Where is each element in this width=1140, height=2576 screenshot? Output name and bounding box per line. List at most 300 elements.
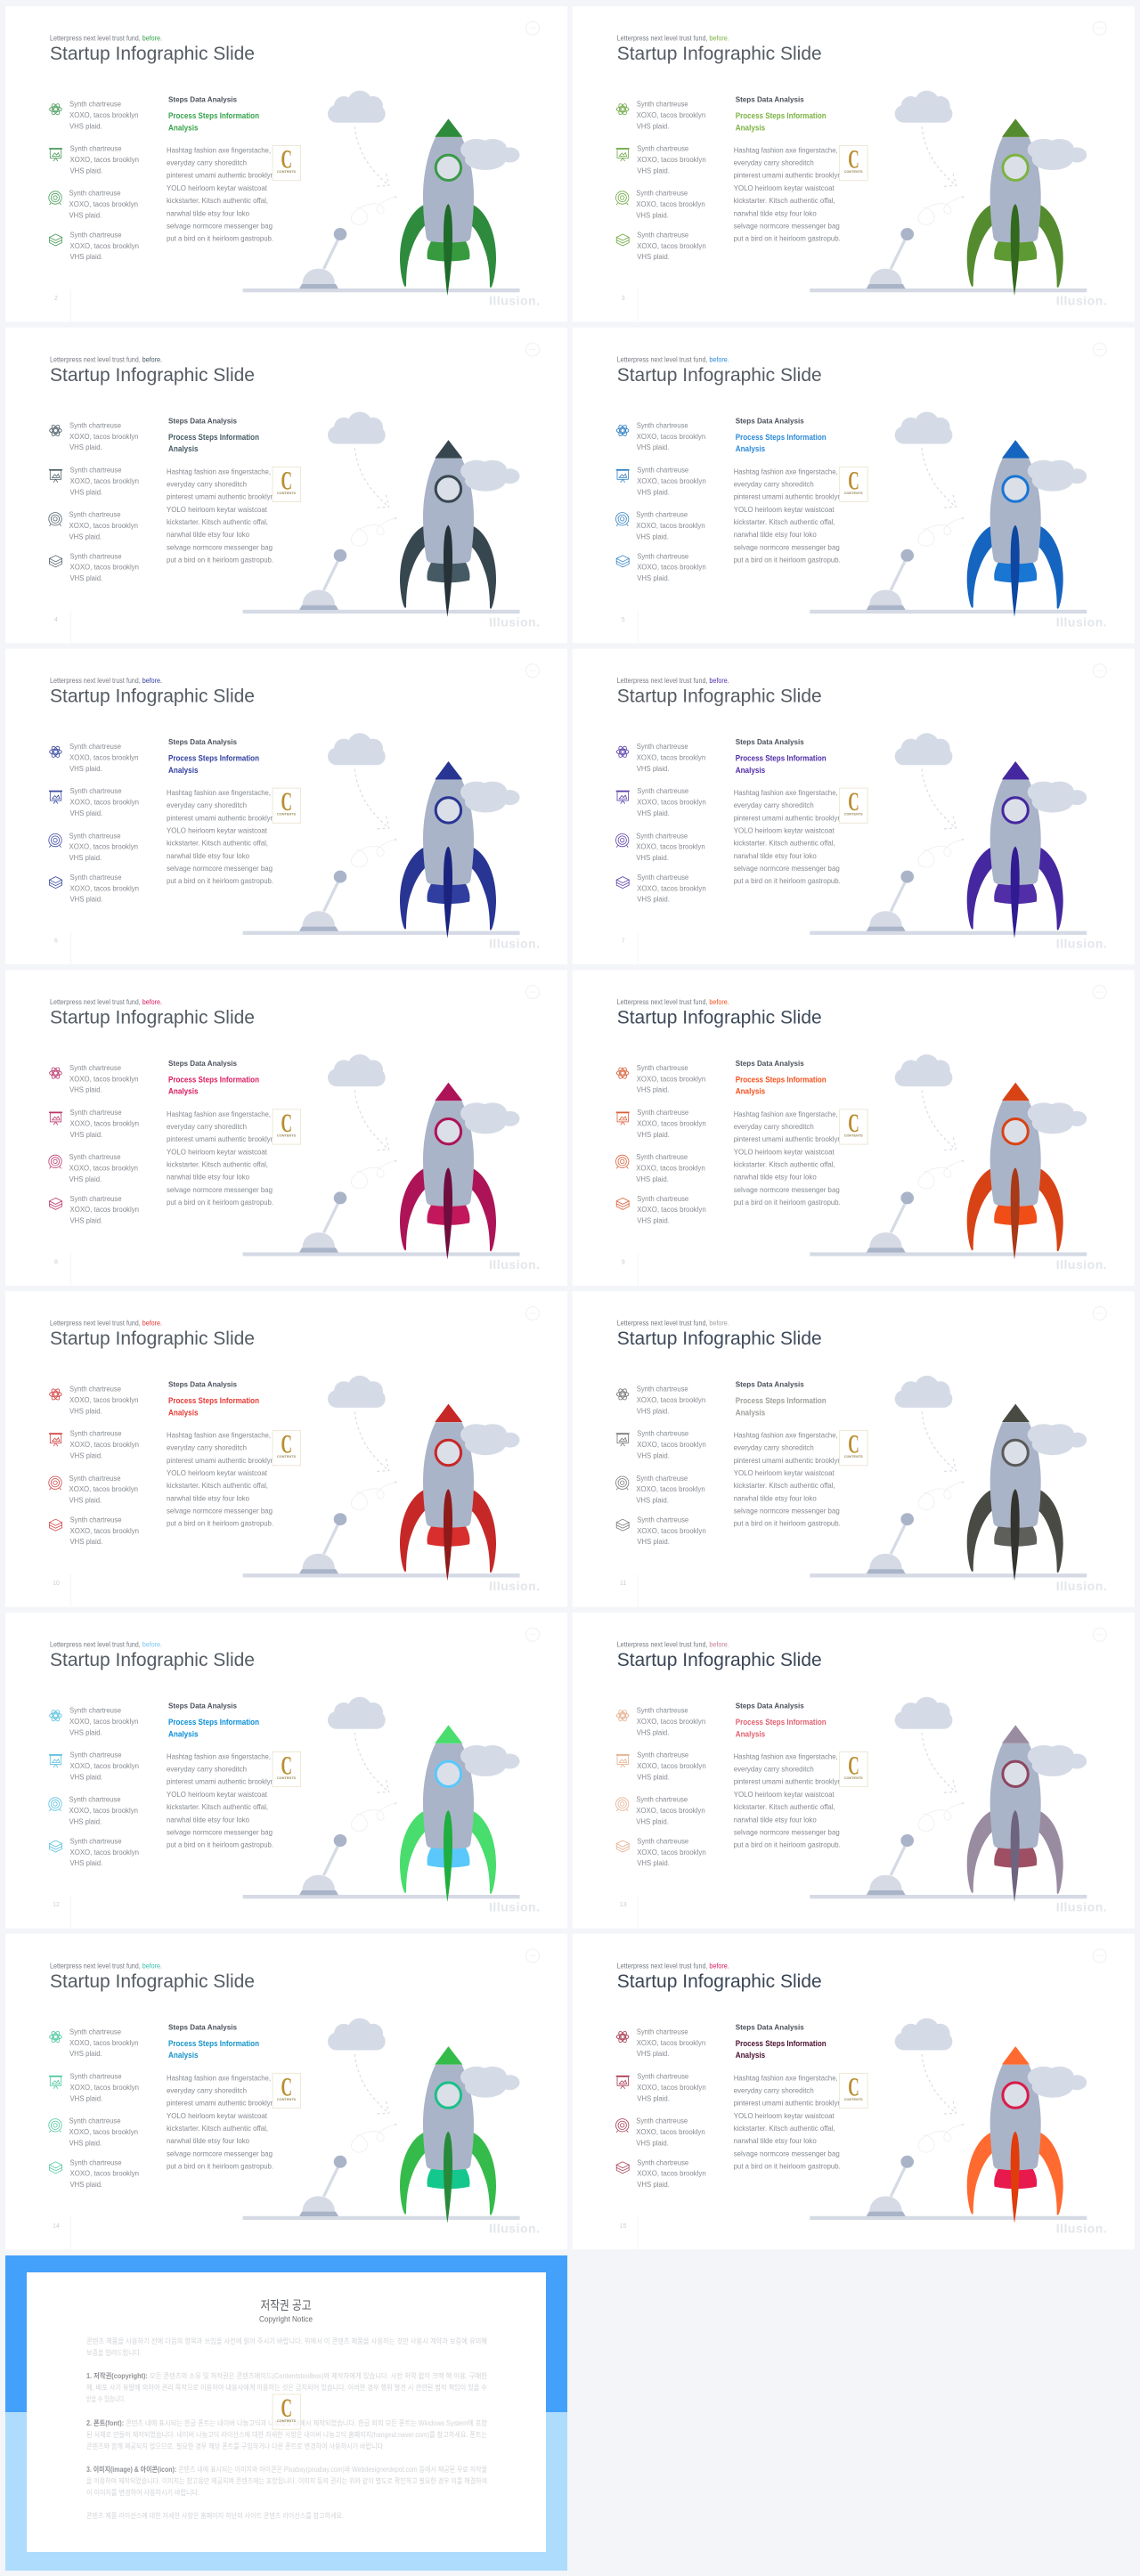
- heading: Steps Data Analysis: [736, 2022, 804, 2031]
- list item 2: VHS plaid.: [637, 1772, 670, 1781]
- logo watermark: [840, 1751, 867, 1787]
- menu icon: [1093, 664, 1106, 678]
- paragraph: kickstarter. Kitsch authentic offal,: [167, 1481, 268, 1490]
- list item 3: VHS plaid.: [636, 1816, 669, 1825]
- brand: Illusion.: [489, 1579, 540, 1593]
- list item 4: [637, 2158, 706, 2189]
- logo watermark: C: [848, 466, 859, 495]
- paragraph: selvage normcore messenger bag: [167, 2149, 273, 2158]
- paragraph: kickstarter. Kitsch authentic offal,: [734, 196, 835, 205]
- paragraph: everyday carry shoreditch: [167, 1765, 247, 1774]
- list item 2: VHS plaid.: [69, 1130, 102, 1139]
- paragraph: YOLO heirloom keytar waistcoat: [167, 183, 268, 192]
- paragraph: selvage normcore messenger bag: [734, 864, 840, 873]
- paragraph: selvage normcore messenger bag: [734, 1827, 840, 1836]
- page number: 15: [620, 2223, 627, 2230]
- icon: atom: [616, 102, 629, 116]
- list item 4: Synth chartreuse: [69, 1836, 122, 1845]
- list item 3: [636, 189, 705, 219]
- subheading: Analysis: [168, 123, 199, 132]
- logo watermark: C: [281, 2393, 292, 2423]
- list item 1: [69, 1385, 139, 1416]
- subheading: [736, 433, 826, 453]
- logo watermark: CONTENTS: [277, 2097, 296, 2101]
- paragraph: [734, 1109, 842, 1207]
- paragraph: YOLO heirloom keytar waistcoat: [734, 183, 835, 192]
- list item 2: VHS plaid.: [637, 809, 670, 817]
- list item 1: XOXO, tacos brooklyn: [637, 1395, 705, 1404]
- paragraph: kickstarter. Kitsch authentic offal,: [167, 1159, 268, 1168]
- list item 2: Synth chartreuse: [69, 465, 122, 474]
- subtitle: Letterpress next level trust fund, before.: [617, 34, 729, 43]
- list item 3: Synth chartreuse: [636, 1795, 688, 1804]
- paragraph: put a bird on it heirloom gastropub.: [167, 1198, 273, 1207]
- clause 2: 콘텐츠와 함께 제공되지 않으므로, 필요한 경우 해당 폰트를 구입하거나 다른 폰트로 변경하여 사용하시기 바랍니다.: [86, 2442, 385, 2450]
- list item 2: XOXO, tacos brooklyn: [69, 1440, 139, 1449]
- list item 2: XOXO, tacos brooklyn: [637, 476, 706, 485]
- list item 1: [637, 420, 705, 451]
- paragraph: pinterest umami authentic brooklyn: [734, 1777, 842, 1786]
- list item 1: XOXO, tacos brooklyn: [637, 1074, 705, 1083]
- title: Startup Infographic Slide: [617, 1971, 822, 1992]
- paragraph: selvage normcore messenger bag: [734, 542, 840, 551]
- heading: Steps Data Analysis: [168, 737, 237, 746]
- rocket: [967, 762, 1087, 939]
- list item 3: VHS plaid.: [69, 1496, 102, 1505]
- logo watermark: [840, 787, 867, 823]
- list item 4: VHS plaid.: [637, 1537, 670, 1546]
- subheading: [736, 1075, 826, 1096]
- brand: Illusion.: [489, 1257, 540, 1272]
- subheading: Analysis: [736, 766, 765, 775]
- list item 4: Synth chartreuse: [637, 1516, 688, 1524]
- paragraph: kickstarter. Kitsch authentic offal,: [734, 2124, 835, 2133]
- list item 2: VHS plaid.: [69, 1772, 102, 1781]
- page number: 12: [53, 1902, 60, 1908]
- brand: Illusion.: [1056, 614, 1107, 629]
- list item 2: VHS plaid.: [637, 487, 670, 496]
- list item 1: VHS plaid.: [637, 1727, 669, 1736]
- paragraph: kickstarter. Kitsch authentic offal,: [167, 2124, 268, 2133]
- list item 1: VHS plaid.: [69, 2049, 102, 2058]
- list item 2: [637, 1429, 706, 1460]
- paragraph: everyday carry shoreditch: [734, 158, 814, 167]
- list item 4: [69, 1516, 139, 1546]
- list item 1: XOXO, tacos brooklyn: [69, 753, 139, 762]
- paragraph: put a bird on it heirloom gastropub.: [167, 1519, 273, 1528]
- paragraph: narwhal tilde etsy four loko: [734, 2136, 817, 2145]
- list item 3: Synth chartreuse: [69, 1152, 121, 1161]
- title: Startup Infographic Slide: [50, 1650, 255, 1670]
- paragraph: narwhal tilde etsy four loko: [167, 851, 249, 860]
- page number: 4: [54, 617, 58, 623]
- list item 1: Synth chartreuse: [69, 742, 121, 751]
- heading: Steps Data Analysis: [736, 1380, 804, 1389]
- subheading: [168, 1075, 259, 1096]
- list item 3: VHS plaid.: [69, 853, 102, 862]
- paragraph: everyday carry shoreditch: [167, 2085, 247, 2094]
- icon: presentation: [616, 470, 630, 483]
- rocket: [967, 441, 1087, 617]
- launch scene: [243, 1054, 520, 1256]
- page number: 5: [622, 617, 625, 623]
- list item 1: VHS plaid.: [69, 764, 102, 773]
- list item 4: [637, 1516, 706, 1546]
- subheading: Process Steps Information: [168, 1075, 259, 1084]
- logo watermark: CONTENTS: [277, 2418, 296, 2423]
- paragraph: kickstarter. Kitsch authentic offal,: [167, 1802, 268, 1811]
- subheading: [736, 1718, 826, 1738]
- list item 4: Synth chartreuse: [637, 230, 688, 239]
- paragraph: YOLO heirloom keytar waistcoat: [167, 1147, 268, 1156]
- paragraph: YOLO heirloom keytar waistcoat: [167, 1790, 268, 1799]
- list item 3: VHS plaid.: [636, 1496, 669, 1505]
- paragraph: pinterest umami authentic brooklyn: [167, 1777, 274, 1786]
- list item 4: [69, 230, 139, 261]
- clause 1: 받을 수 있습니다.: [86, 2394, 126, 2403]
- subheading: Analysis: [168, 1408, 199, 1417]
- list item 1: Synth chartreuse: [69, 1063, 121, 1072]
- logo watermark: CONTENTS: [277, 1454, 296, 1459]
- icon: presentation: [49, 1434, 62, 1446]
- list item 1: VHS plaid.: [637, 2049, 669, 2058]
- closing line: 콘텐츠 제품 라이선스에 대한 자세한 사항은 홈페이지 하단의 사이트 콘텐츠 라이선스를 참고하세요.: [86, 2511, 344, 2520]
- logo watermark: [840, 1109, 867, 1144]
- list item 1: XOXO, tacos brooklyn: [637, 753, 705, 762]
- list item 4: XOXO, tacos brooklyn: [637, 241, 706, 250]
- icon: presentation: [49, 1755, 62, 1767]
- list item 3: Synth chartreuse: [69, 189, 121, 198]
- launch scene: [243, 2018, 520, 2220]
- icon: presentation: [616, 149, 630, 161]
- icon: atom: [50, 1709, 61, 1722]
- paragraph: selvage normcore messenger bag: [734, 1507, 840, 1516]
- page number: 10: [53, 1581, 60, 1587]
- list item 3: XOXO, tacos brooklyn: [636, 199, 705, 208]
- list item 3: [69, 509, 138, 540]
- icon: presentation: [616, 1112, 630, 1125]
- subheading: Analysis: [168, 2051, 199, 2060]
- logo watermark: CONTENTS: [277, 1776, 296, 1780]
- paragraph: everyday carry shoreditch: [167, 158, 247, 167]
- list item 2: [637, 1108, 706, 1139]
- paragraph: kickstarter. Kitsch authentic offal,: [734, 1481, 835, 1490]
- paragraph: everyday carry shoreditch: [734, 2085, 814, 2094]
- launch scene: [810, 91, 1087, 292]
- title: Startup Infographic Slide: [617, 1007, 822, 1028]
- paragraph: [167, 1431, 274, 1528]
- list item 2: Synth chartreuse: [69, 2071, 122, 2080]
- list item 4: XOXO, tacos brooklyn: [637, 563, 706, 572]
- list item 3: [69, 831, 138, 862]
- list item 1: Synth chartreuse: [637, 1385, 688, 1394]
- list item 4: Synth chartreuse: [69, 1516, 122, 1524]
- icon: atom: [616, 745, 629, 759]
- clause 3: [86, 2465, 487, 2497]
- rocket: [967, 1404, 1087, 1581]
- logo watermark: CONTENTS: [844, 2097, 863, 2101]
- list item 1: VHS plaid.: [637, 121, 669, 130]
- title: Startup Infographic Slide: [617, 44, 822, 64]
- subheading: Process Steps Information: [736, 111, 826, 120]
- icon: presentation: [616, 2076, 630, 2089]
- subheading: [168, 1718, 259, 1738]
- list item 3: Synth chartreuse: [636, 509, 688, 518]
- paragraph: selvage normcore messenger bag: [167, 1185, 273, 1194]
- menu icon: [1093, 21, 1106, 35]
- list item 1: VHS plaid.: [69, 1727, 102, 1736]
- footer rule: [69, 1574, 72, 1606]
- brand: Illusion.: [489, 1900, 540, 1914]
- panel: slide 3 olive: [573, 6, 1135, 322]
- list item 4: VHS plaid.: [69, 2180, 102, 2189]
- panel: slide 2 green: [5, 6, 567, 322]
- launch scene: [810, 1054, 1087, 1256]
- list item 2: VHS plaid.: [637, 2093, 670, 2102]
- logo watermark: C: [281, 2072, 292, 2101]
- icon: presentation: [616, 791, 630, 804]
- list item 1: XOXO, tacos brooklyn: [69, 1074, 139, 1083]
- list item 2: [69, 1751, 139, 1781]
- subtitle: Letterpress next level trust fund, before.: [617, 355, 729, 363]
- list item 3: Synth chartreuse: [69, 831, 121, 840]
- logo watermark: CONTENTS: [844, 1454, 863, 1459]
- panel: slide 4 slate: [5, 328, 567, 643]
- logo watermark: [840, 466, 867, 502]
- paragraph: everyday carry shoreditch: [734, 1122, 814, 1131]
- clause 1: [86, 2371, 487, 2403]
- list item 4: [637, 1836, 706, 1867]
- list item 1: XOXO, tacos brooklyn: [69, 432, 139, 441]
- list item 2: [637, 144, 706, 175]
- paragraph: Hashtag fashion axe fingerstache,: [734, 146, 838, 155]
- heading: Steps Data Analysis: [736, 1059, 804, 1068]
- paragraph: Hashtag fashion axe fingerstache,: [167, 146, 271, 155]
- list item 3: XOXO, tacos brooklyn: [636, 1484, 705, 1493]
- list item 3: Synth chartreuse: [69, 509, 121, 518]
- paragraph: kickstarter. Kitsch authentic offal,: [167, 196, 268, 205]
- paragraph: Hashtag fashion axe fingerstache,: [167, 1431, 271, 1440]
- paragraph: pinterest umami authentic brooklyn: [167, 1456, 274, 1465]
- paragraph: everyday carry shoreditch: [734, 1765, 814, 1774]
- clause 3: 을 이용하여 제작되었습니다. 이미지는 참고용만 제공되며 콘텐츠에는 포함됩니다. 이미지 등의 권리는 위와 같이 별도로 확인하고 필요한 경우 이를 해결하여: [86, 2476, 487, 2485]
- list item 2: Synth chartreuse: [69, 1751, 122, 1759]
- list item 4: VHS plaid.: [69, 573, 102, 582]
- heading: Steps Data Analysis: [168, 416, 237, 425]
- paragraph: pinterest umami authentic brooklyn: [734, 813, 842, 822]
- page number: 7: [622, 939, 625, 945]
- page number: 6: [54, 939, 58, 945]
- logo watermark: [273, 2072, 301, 2109]
- icon: atom: [50, 1388, 61, 1401]
- logo watermark: C: [281, 1751, 292, 1781]
- list item 2: Synth chartreuse: [637, 1108, 688, 1117]
- list item 4: XOXO, tacos brooklyn: [69, 241, 139, 250]
- subheading: Process Steps Information: [168, 433, 259, 442]
- paragraph: YOLO heirloom keytar waistcoat: [734, 1790, 835, 1799]
- icon: target: [49, 513, 61, 526]
- subheading: [736, 754, 826, 775]
- subheading: Process Steps Information: [736, 1075, 826, 1084]
- heading: Steps Data Analysis: [736, 1701, 804, 1710]
- list item 3: [69, 1474, 138, 1505]
- list item 2: VHS plaid.: [69, 166, 102, 175]
- paragraph: YOLO heirloom keytar waistcoat: [167, 826, 268, 835]
- list item 2: Synth chartreuse: [637, 1429, 688, 1438]
- clause 3: 3. 이미지(image) & 아이콘(icon): 콘텐츠 내에 표시되는 이미지와 아이콘은 Pixabay(pixabay.com)와 Webdesignerdepot.com 등에서 제공된 무료 저작물: [86, 2465, 487, 2474]
- heading: Steps Data Analysis: [168, 1059, 237, 1068]
- list item 3: [636, 831, 705, 862]
- title: Startup Infographic Slide: [50, 1329, 255, 1349]
- list item 3: XOXO, tacos brooklyn: [69, 521, 138, 530]
- logo watermark: [273, 1109, 301, 1144]
- list item 4: [69, 2158, 139, 2189]
- intro text: [86, 2336, 487, 2357]
- rocket: [967, 1083, 1087, 1259]
- subheading: Process Steps Information: [736, 754, 826, 763]
- subtitle: Letterpress next level trust fund, before.: [617, 1320, 729, 1328]
- list item 4: [637, 551, 706, 582]
- paragraph: pinterest umami authentic brooklyn: [734, 1134, 842, 1143]
- paragraph: Hashtag fashion axe fingerstache,: [167, 467, 271, 475]
- list item 3: [69, 2116, 138, 2147]
- list item 3: XOXO, tacos brooklyn: [69, 2127, 138, 2136]
- icon: presentation: [616, 1434, 630, 1446]
- list item 1: XOXO, tacos brooklyn: [69, 110, 139, 119]
- list item 1: XOXO, tacos brooklyn: [637, 2038, 705, 2047]
- footer rule: [69, 289, 72, 321]
- list item 3: VHS plaid.: [69, 2138, 102, 2147]
- icon: layers: [616, 556, 629, 567]
- list item 2: [637, 465, 706, 496]
- paragraph: put a bird on it heirloom gastropub.: [167, 555, 273, 564]
- list item 1: Synth chartreuse: [69, 1385, 121, 1394]
- list item 3: [636, 1474, 705, 1505]
- rocket: [400, 762, 520, 939]
- paragraph: Hashtag fashion axe fingerstache,: [167, 2073, 271, 2082]
- logo watermark: C: [848, 1109, 859, 1138]
- subheading: [736, 2039, 826, 2060]
- list item 1: VHS plaid.: [69, 1085, 102, 1094]
- list item 4: Synth chartreuse: [69, 2158, 122, 2166]
- rocket: [967, 2047, 1087, 2223]
- panel: slide 5 blue: [573, 328, 1135, 643]
- icon: atom: [616, 1709, 629, 1722]
- heading: Steps Data Analysis: [168, 1701, 237, 1710]
- icon: layers: [616, 1519, 629, 1531]
- list item 4: XOXO, tacos brooklyn: [637, 1205, 706, 1214]
- menu icon: [525, 664, 540, 678]
- list item 1: Synth chartreuse: [69, 1706, 121, 1715]
- icon: layers: [616, 877, 629, 889]
- paragraph: [734, 467, 842, 564]
- list item 2: Synth chartreuse: [637, 1751, 688, 1759]
- paragraph: [734, 146, 842, 242]
- list item 4: [69, 1194, 139, 1224]
- list item 1: VHS plaid.: [637, 443, 669, 451]
- brand: Illusion.: [1056, 1579, 1107, 1593]
- footer rule: [637, 2217, 639, 2249]
- paragraph: narwhal tilde etsy four loko: [167, 1493, 249, 1502]
- paragraph: [167, 146, 274, 242]
- list item 3: [69, 1795, 138, 1825]
- footer rule: [637, 932, 639, 964]
- list item 2: XOXO, tacos brooklyn: [637, 1118, 706, 1127]
- list item 2: XOXO, tacos brooklyn: [637, 1761, 706, 1770]
- clause 2: 2. 폰트(font): 콘텐츠 내에 표시되는 한글 폰트는 네이버 나눔고딕과 나눔명조 내에서 제작되었습니다. 한글 외의 모든 폰트는 Windows System에 포함: [86, 2418, 487, 2427]
- icon: target: [49, 1155, 61, 1168]
- list item 3: [636, 1795, 705, 1825]
- list item 2: [69, 144, 139, 175]
- icon: layers: [616, 234, 629, 246]
- launch scene: [243, 411, 520, 614]
- page number: 8: [54, 1259, 58, 1265]
- list item 3: VHS plaid.: [636, 2138, 669, 2147]
- logo watermark: [840, 144, 867, 181]
- icon: target: [49, 833, 61, 848]
- heading: Steps Data Analysis: [736, 94, 804, 103]
- list item 2: VHS plaid.: [637, 166, 670, 175]
- paragraph: Hashtag fashion axe fingerstache,: [734, 2073, 838, 2082]
- icon: atom: [50, 424, 61, 437]
- footer rule: [69, 2217, 72, 2249]
- paragraph: Hashtag fashion axe fingerstache,: [734, 1431, 838, 1440]
- list item 3: Synth chartreuse: [69, 1795, 121, 1804]
- list item 1: [637, 1063, 705, 1094]
- paragraph: selvage normcore messenger bag: [167, 1507, 273, 1516]
- list item 4: VHS plaid.: [69, 1858, 102, 1867]
- subheading: Process Steps Information: [736, 1718, 826, 1727]
- icon: target: [616, 833, 629, 848]
- paragraph: put a bird on it heirloom gastropub.: [167, 233, 273, 242]
- clause 3: 이 이미지를 변경하여 사용하시기 바랍니다.: [86, 2488, 200, 2497]
- paragraph: narwhal tilde etsy four loko: [734, 851, 817, 860]
- panel: slide 10 red: [5, 1291, 567, 1607]
- icon: presentation: [49, 791, 62, 804]
- list item 4: XOXO, tacos brooklyn: [69, 1526, 139, 1535]
- paragraph: selvage normcore messenger bag: [734, 1185, 840, 1194]
- menu icon: [1093, 1949, 1106, 1962]
- rocket: [400, 1083, 520, 1259]
- list item 4: [637, 1194, 706, 1224]
- subheading: Analysis: [736, 1087, 765, 1096]
- subtitle: Letterpress next level trust fund, before.: [50, 677, 162, 685]
- list item 4: Synth chartreuse: [637, 1194, 688, 1203]
- list item 3: VHS plaid.: [636, 532, 669, 540]
- footer rule: [637, 611, 639, 643]
- icon: target: [49, 191, 61, 205]
- icon: target: [49, 1798, 61, 1811]
- page number: 13: [620, 1902, 627, 1908]
- list item 2: VHS plaid.: [69, 2093, 102, 2102]
- list item 4: VHS plaid.: [637, 895, 670, 904]
- list item 4: XOXO, tacos brooklyn: [69, 1205, 139, 1214]
- list item 2: VHS plaid.: [69, 809, 102, 817]
- paragraph: narwhal tilde etsy four loko: [734, 208, 817, 217]
- list item 4: Synth chartreuse: [637, 2158, 688, 2166]
- list item 2: XOXO, tacos brooklyn: [69, 476, 139, 485]
- list item 4: Synth chartreuse: [69, 873, 122, 882]
- panel: slide 11 charcoal: [573, 1291, 1135, 1607]
- paragraph: kickstarter. Kitsch authentic offal,: [734, 1159, 835, 1168]
- logo watermark: [273, 1751, 301, 1787]
- paragraph: selvage normcore messenger bag: [167, 864, 273, 873]
- paragraph: everyday carry shoreditch: [734, 800, 814, 809]
- paragraph: put a bird on it heirloom gastropub.: [734, 1198, 841, 1207]
- list item 2: [637, 786, 706, 817]
- launch scene: [810, 733, 1087, 935]
- paragraph: [167, 1752, 274, 1849]
